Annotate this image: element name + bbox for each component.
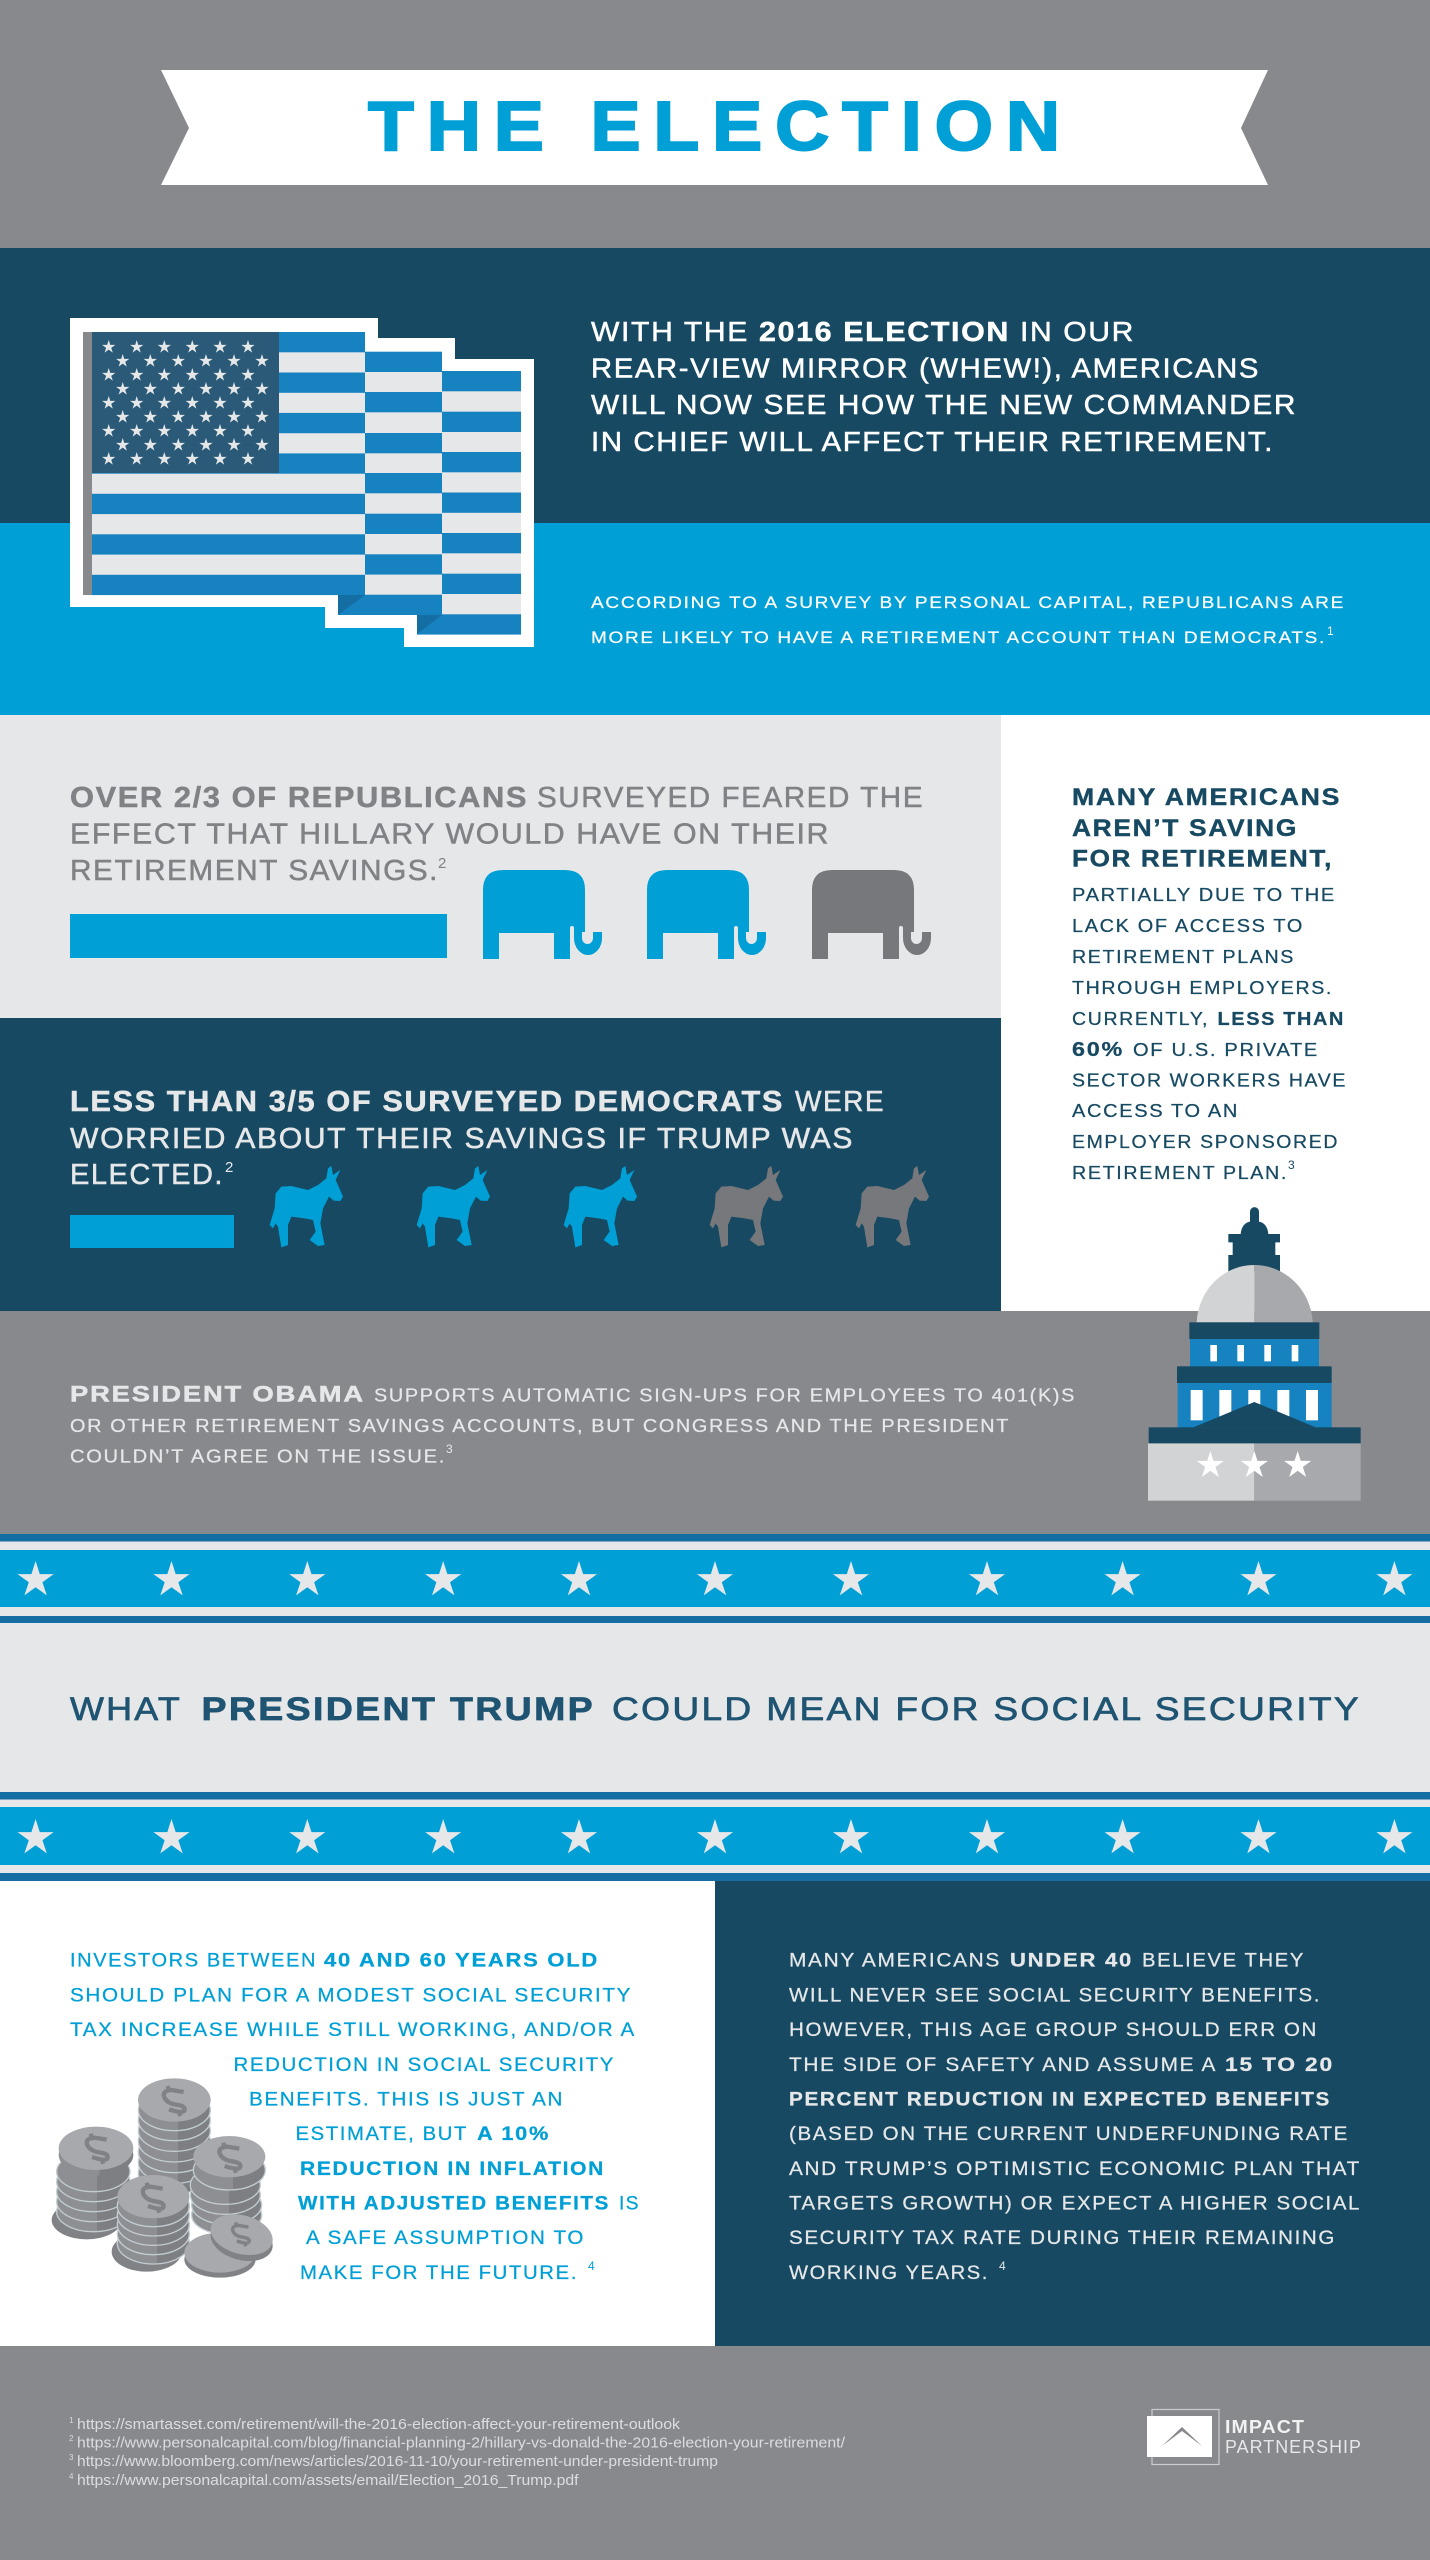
icon: donkey 3 — [564, 1166, 637, 1247]
democrats text: WORRIED ABOUT THEIR SAVINGS IF TRUMP WAS — [70, 1123, 854, 1155]
investors text: BENEFITS. THIS IS JUST AN — [249, 2090, 564, 2110]
investors text: MAKE FOR THE FUTURE. — [300, 2263, 578, 2284]
footnotes — [69, 2416, 846, 2489]
icon: donkey 4 — [710, 1166, 783, 1247]
investors text: A SAFE ASSUMPTION TO — [306, 2228, 585, 2249]
icon: capitol building — [1148, 1207, 1361, 1501]
many americans body — [1072, 885, 1347, 1183]
coin stack back — [138, 2078, 211, 2194]
democrats text — [70, 1086, 885, 1191]
republicans text: EFFECT THAT HILLARY WOULD HAVE ON THEIR — [70, 818, 830, 850]
panel: social security heading — [0, 1623, 1430, 1792]
many americans body: 60% — [1072, 1039, 1124, 1061]
investors text: REDUCTION IN SOCIAL SECURITY — [234, 2055, 615, 2076]
many americans body: 3 — [1288, 1158, 1295, 1172]
heading text: WHAT — [70, 1691, 182, 1727]
logo: impact partnership: PARTNERSHIP — [1225, 2437, 1362, 2457]
republicans text: 2 — [438, 855, 446, 872]
survey text: 1 — [1327, 624, 1334, 638]
under 40 text: WILL NEVER SEE SOCIAL SECURITY BENEFITS. — [789, 1985, 1321, 2006]
footer panel — [0, 2346, 1430, 2560]
bar: democrats share — [70, 1215, 234, 1248]
obama text: PRESIDENT OBAMA — [70, 1382, 365, 1406]
survey text: MORE LIKELY TO HAVE A RETIREMENT ACCOUNT THAN DEMOCRATS. — [591, 628, 1326, 647]
footnotes: 1 — [69, 2416, 74, 2425]
panel: president obama — [0, 1311, 1430, 1534]
many americans body: LESS THAN — [1218, 1009, 1345, 1029]
investors text: ESTIMATE, BUT — [296, 2124, 468, 2145]
intro statement text: REAR-VIEW MIRROR (WHEW!), AMERICANS — [591, 352, 1260, 384]
intro statement text: IN CHIEF WILL AFFECT THEIR RETIREMENT. — [591, 426, 1274, 457]
investors text: REDUCTION IN INFLATION — [300, 2159, 605, 2180]
many americans body: LACK OF ACCESS TO — [1072, 916, 1304, 936]
investors text: SHOULD PLAN FOR A MODEST SOCIAL SECURITY — [70, 1985, 632, 2006]
many americans body: EMPLOYER SPONSORED — [1072, 1132, 1339, 1152]
icon: elephant 1 — [483, 870, 602, 959]
obama text — [70, 1382, 1076, 1466]
footnotes: 3 — [69, 2453, 74, 2462]
footnotes: 2 — [69, 2434, 74, 2443]
under 40 text: PERCENT REDUCTION IN EXPECTED BENEFITS — [789, 2090, 1331, 2110]
icon: donkey 2 — [417, 1166, 490, 1247]
democrats text: ELECTED. — [70, 1159, 224, 1191]
coin stack left — [52, 2127, 133, 2239]
coins loose — [184, 2241, 256, 2278]
survey text: ACCORDING TO A SURVEY BY PERSONAL CAPITAL, REPUBLICANS ARE — [591, 593, 1345, 612]
many americans heading: AREN’T SAVING — [1072, 815, 1298, 842]
many americans body: THROUGH EMPLOYERS. — [1072, 978, 1333, 998]
under 40 text: SECURITY TAX RATE DURING THEIR REMAINING — [789, 2228, 1336, 2249]
footnotes: https://www.bloomberg.com/news/articles/2016-11-10/your-retirement-under-president-trump — [77, 2454, 718, 2470]
obama text: COULDN’T AGREE ON THE ISSUE. — [70, 1446, 446, 1466]
many americans body: CURRENTLY, — [1072, 1009, 1209, 1029]
icon: elephant 2 — [647, 870, 766, 959]
many americans heading: FOR RETIREMENT, — [1072, 846, 1333, 873]
investors text: INVESTORS BETWEEN — [70, 1951, 317, 1972]
republicans text: RETIREMENT SAVINGS. — [70, 855, 439, 887]
coin stack right — [190, 2136, 265, 2234]
intro statement text: WITH THE — [591, 316, 749, 347]
under 40 text: 15 TO 20 — [1225, 2055, 1334, 2076]
investors text: A 10% — [477, 2124, 550, 2145]
footnotes: https://www.personalcapital.com/assets/email/Election_2016_Trump.pdf — [77, 2473, 580, 2489]
star band bottom — [0, 1792, 1430, 1881]
logo: impact partnership: IMPACT — [1225, 2417, 1305, 2437]
obama text: 3 — [446, 1442, 453, 1456]
heading text — [70, 1691, 1361, 1727]
coin stack front — [112, 2175, 189, 2272]
investors text: TAX INCREASE WHILE STILL WORKING, AND/OR A — [70, 2020, 636, 2041]
under 40 text: THE SIDE OF SAFETY AND ASSUME A — [789, 2055, 1217, 2076]
under 40 text: WORKING YEARS. — [789, 2263, 989, 2284]
many americans body: RETIREMENT PLAN. — [1072, 1163, 1288, 1183]
many americans body: SECTOR WORKERS HAVE — [1072, 1070, 1347, 1090]
icon: elephant 3 — [812, 870, 931, 959]
panel: under 40 — [715, 1881, 1430, 2346]
under 40 text — [789, 1951, 1361, 2284]
intro statement text: 2016 ELECTION — [759, 316, 1010, 347]
footnotes: https://www.personalcapital.com/blog/financial-planning-2/hillary-vs-donald-the-2016-election-your-retirement/ — [77, 2436, 846, 2452]
many americans body: RETIREMENT PLANS — [1072, 947, 1295, 967]
icon: coin stacks — [52, 2078, 277, 2278]
panel: investors 40 to 60 — [0, 1881, 715, 2346]
republicans text: OVER 2/3 OF REPUBLICANS — [70, 782, 528, 814]
header background — [0, 0, 1430, 248]
panel: intro blue — [0, 523, 1430, 715]
investors text: IS — [619, 2194, 640, 2215]
many americans heading — [1072, 784, 1341, 873]
panel: many americans — [1001, 715, 1430, 1311]
under 40 text: AND TRUMP’S OPTIMISTIC ECONOMIC PLAN THAT — [789, 2159, 1361, 2180]
star band top — [0, 1534, 1430, 1623]
investors text: 40 AND 60 YEARS OLD — [324, 1951, 599, 1972]
under 40 text: HOWEVER, THIS AGE GROUP SHOULD ERR ON — [789, 2020, 1318, 2041]
under 40 text: TARGETS GROWTH) OR EXPECT A HIGHER SOCIAL — [789, 2194, 1361, 2215]
intro statement text: IN OUR — [1020, 316, 1135, 347]
many americans body: ACCESS TO AN — [1072, 1101, 1239, 1121]
heading text: PRESIDENT TRUMP — [202, 1691, 595, 1727]
republicans text — [70, 782, 924, 887]
title banner — [161, 70, 1268, 185]
icon: american flag — [70, 318, 534, 647]
footnotes: https://smartasset.com/retirement/will-the-2016-election-affect-your-retirement-outlook — [77, 2417, 681, 2433]
heading text: COULD MEAN FOR SOCIAL SECURITY — [612, 1691, 1361, 1727]
title: THE ELECTION — [368, 87, 1073, 165]
investors text — [70, 1951, 640, 2284]
intro statement text — [591, 316, 1297, 457]
under 40 text: UNDER 40 — [1010, 1951, 1133, 1972]
survey text — [591, 593, 1345, 647]
footnotes: 4 — [69, 2472, 74, 2481]
panel: democrats — [0, 1018, 1001, 1311]
obama text: SUPPORTS AUTOMATIC SIGN-UPS FOR EMPLOYEES TO 401(K)S — [374, 1386, 1076, 1406]
icon: donkey 5 — [856, 1166, 929, 1247]
panel: intro dark — [0, 248, 1430, 523]
democrats text: 2 — [225, 1159, 233, 1176]
intro statement text: WILL NOW SEE HOW THE NEW COMMANDER — [591, 389, 1297, 420]
under 40 text: BELIEVE THEY — [1142, 1951, 1305, 1972]
under 40 text: (BASED ON THE CURRENT UNDERFUNDING RATE — [789, 2124, 1349, 2145]
many americans body: PARTIALLY DUE TO THE — [1072, 885, 1336, 905]
democrats text: LESS THAN 3/5 OF SURVEYED DEMOCRATS — [70, 1086, 784, 1118]
under 40 text: MANY AMERICANS — [789, 1951, 1001, 1972]
republicans text: SURVEYED FEARED THE — [537, 782, 924, 814]
under 40 text: 4 — [999, 2259, 1006, 2273]
investors text: 4 — [588, 2259, 595, 2273]
obama text: OR OTHER RETIREMENT SAVINGS ACCOUNTS, BUT CONGRESS AND THE PRESIDENT — [70, 1416, 1010, 1436]
many americans heading: MANY AMERICANS — [1072, 784, 1341, 811]
panel: republicans — [0, 715, 1001, 1018]
many americans body: OF U.S. PRIVATE — [1133, 1040, 1319, 1060]
logo: impact partnership — [1147, 2410, 1362, 2464]
icon: donkey 1 — [270, 1166, 343, 1247]
investors text: WITH ADJUSTED BENEFITS — [298, 2194, 610, 2215]
bar: republicans share — [70, 914, 447, 958]
democrats text: WERE — [795, 1086, 885, 1118]
